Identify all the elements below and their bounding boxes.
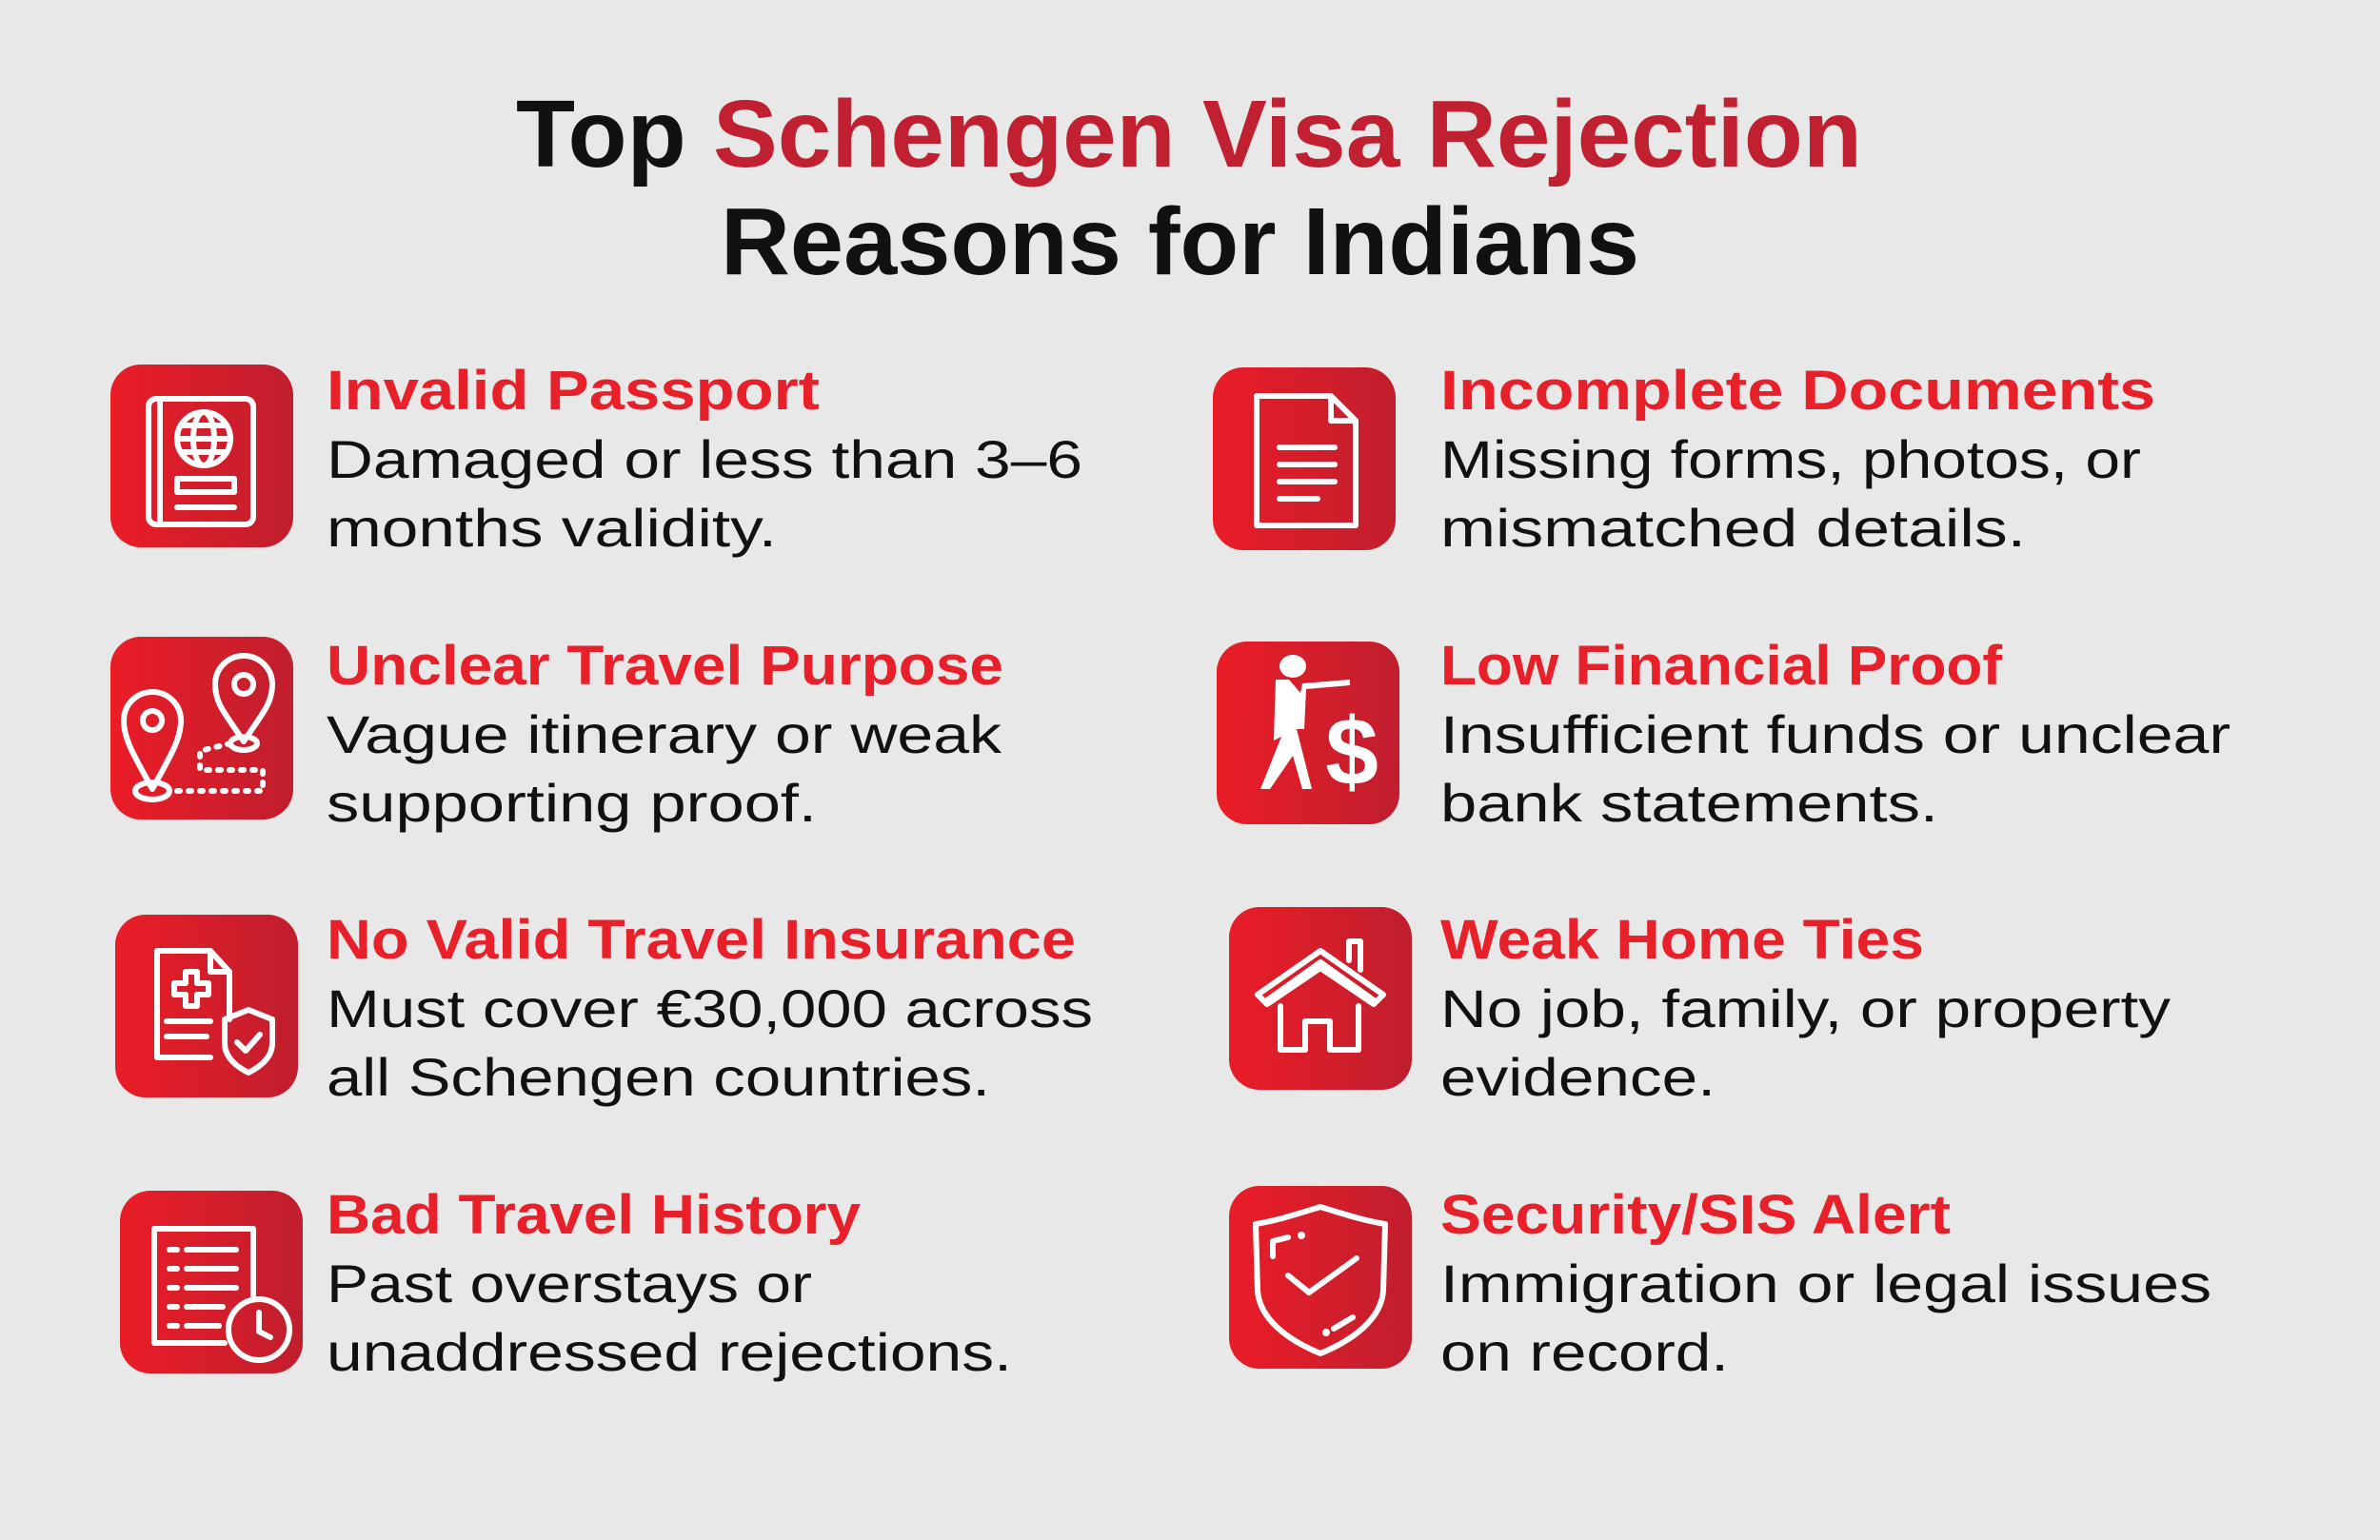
item: bad travel history: unaddressed rejections. bbox=[327, 1322, 1012, 1382]
item: unclear travel purpose: supporting proof. bbox=[327, 773, 817, 833]
item: low financial proof: bank statements. bbox=[1440, 773, 1938, 833]
icon: insurance document with shield bbox=[115, 915, 298, 1097]
item: unclear travel purpose: Unclear Travel Purpose bbox=[327, 635, 1003, 697]
title: Top Schengen Visa Rejection bbox=[516, 81, 1862, 188]
icon: document with clock bbox=[120, 1191, 303, 1373]
item: incomplete documents: Missing forms, photos, or bbox=[1440, 429, 2141, 489]
item: invalid passport: Damaged or less than 3–6 bbox=[327, 429, 1082, 489]
title bbox=[516, 81, 1862, 295]
item: incomplete documents: mismatched details. bbox=[1440, 498, 2026, 558]
item: no valid travel insurance bbox=[115, 909, 1093, 1107]
item: weak home ties: No job, family, or property bbox=[1440, 978, 2171, 1038]
item: bad travel history bbox=[120, 1184, 1012, 1382]
item: low financial proof: Insufficient funds or unclear bbox=[1440, 704, 2231, 764]
icon: map pins bbox=[110, 637, 293, 819]
item: incomplete documents bbox=[1213, 360, 2155, 558]
item: incomplete documents: Incomplete Documents bbox=[1440, 360, 2155, 422]
item: weak home ties: Weak Home Ties bbox=[1440, 909, 1924, 971]
item: bad travel history: Bad Travel History bbox=[327, 1184, 861, 1246]
title: Reasons for Indians bbox=[721, 188, 1639, 295]
item: unclear travel purpose bbox=[110, 635, 1003, 833]
item: no valid travel insurance: Must cover €30,000 across bbox=[327, 978, 1093, 1038]
icon: shield with check bbox=[1229, 1186, 1412, 1369]
icon: document bbox=[1213, 367, 1396, 550]
item: unclear travel purpose: Vague itinerary or weak bbox=[327, 704, 1002, 764]
item: weak home ties bbox=[1229, 907, 2171, 1107]
icon: person and dollar: $ bbox=[1325, 699, 1378, 805]
icon: person and dollar bbox=[1217, 642, 1399, 824]
item: security/SIS alert bbox=[1229, 1184, 2211, 1382]
item: no valid travel insurance: No Valid Travel Insurance bbox=[327, 909, 1076, 971]
item: security/SIS alert: Immigration or legal issues bbox=[1440, 1254, 2211, 1313]
item: bad travel history: Past overstays or bbox=[327, 1254, 812, 1313]
icon: house bbox=[1229, 907, 1412, 1090]
item: invalid passport: months validity. bbox=[327, 498, 777, 558]
item: invalid passport: Invalid Passport bbox=[327, 360, 820, 422]
item: low financial proof: Low Financial Proof bbox=[1440, 635, 2003, 697]
item: no valid travel insurance: all Schengen countries. bbox=[327, 1047, 990, 1107]
item: security/SIS alert: on record. bbox=[1440, 1322, 1729, 1382]
item: weak home ties: evidence. bbox=[1440, 1047, 1716, 1107]
icon: passport bbox=[110, 365, 293, 547]
item: security/SIS alert: Security/SIS Alert bbox=[1440, 1184, 1951, 1246]
item: invalid passport bbox=[110, 360, 1082, 558]
item: low financial proof bbox=[1217, 635, 2231, 833]
